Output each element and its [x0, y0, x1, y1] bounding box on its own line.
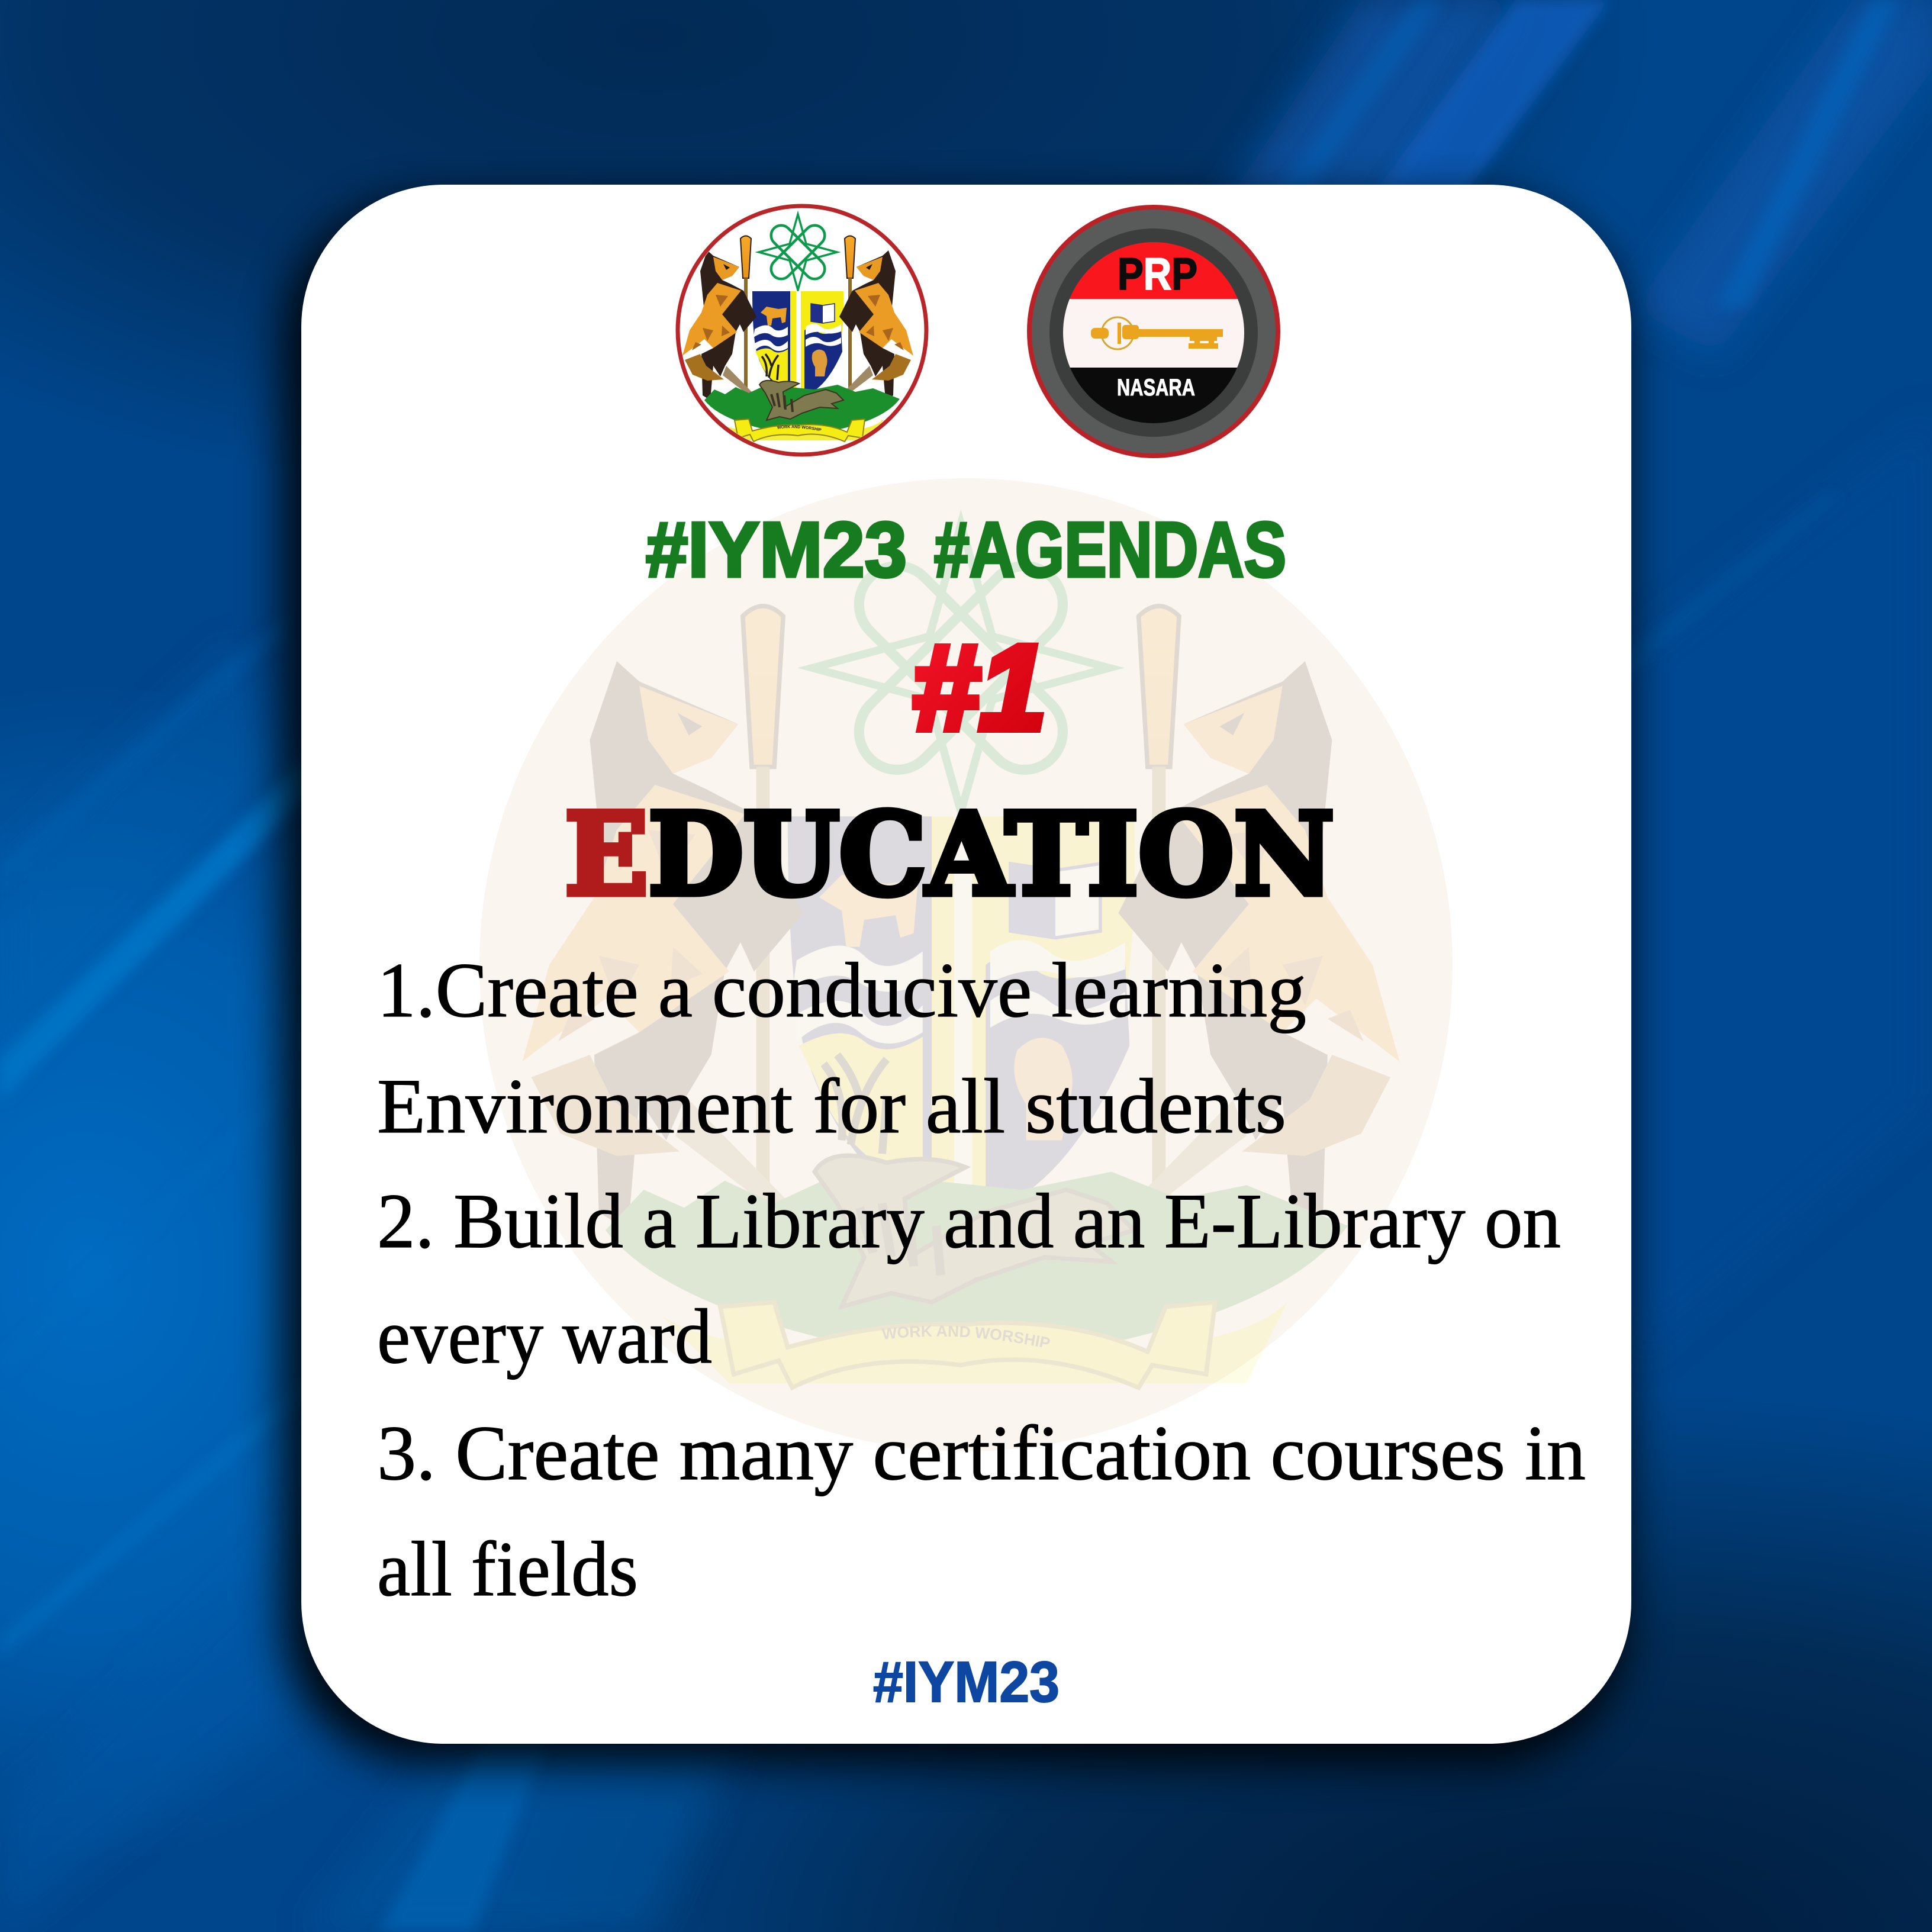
text block: education agenda list: 1.Create a conducive learning: [377, 946, 1306, 1033]
heading: #1: #1: [912, 620, 1046, 755]
icon: gold key: [1091, 317, 1223, 349]
heading: #IYM23 #AGENDAS: #IYM23: [646, 506, 907, 593]
text block: education agenda list: 3. Create many certification courses in: [377, 1409, 1586, 1496]
logo: state coat of arms: WORK AND WORSHIP: [777, 425, 822, 433]
logo: state coat of arms: [678, 206, 926, 455]
logo: PRP Nasara badge: [1029, 207, 1278, 456]
heading: EDUCATION: EDUCATION: [565, 788, 1334, 920]
text block: education agenda list: [377, 946, 1586, 1612]
text block: education agenda list: 2. Build a Library and an E-Library on: [377, 1177, 1561, 1264]
watermark: faded coat of arms: [479, 478, 1453, 1451]
panel: white card: [301, 185, 1631, 1744]
text block: education agenda list: Environment for all students: [377, 1062, 1286, 1149]
text block: education agenda list: all fields: [377, 1525, 638, 1612]
footer hashtag: #IYM23: [873, 1650, 1060, 1714]
logo: PRP Nasara badge: PRP: [1118, 249, 1197, 300]
card shadow: [283, 200, 1627, 1763]
watermark: faded coat of arms: WORK AND WORSHIP: [882, 1326, 1050, 1347]
heading: #IYM23 #AGENDAS: #AGENDAS: [934, 506, 1286, 593]
text block: education agenda list: every ward: [377, 1293, 712, 1380]
logo: PRP Nasara badge: NASARA: [1117, 375, 1195, 401]
heading: #IYM23 #AGENDAS: [646, 506, 1286, 593]
